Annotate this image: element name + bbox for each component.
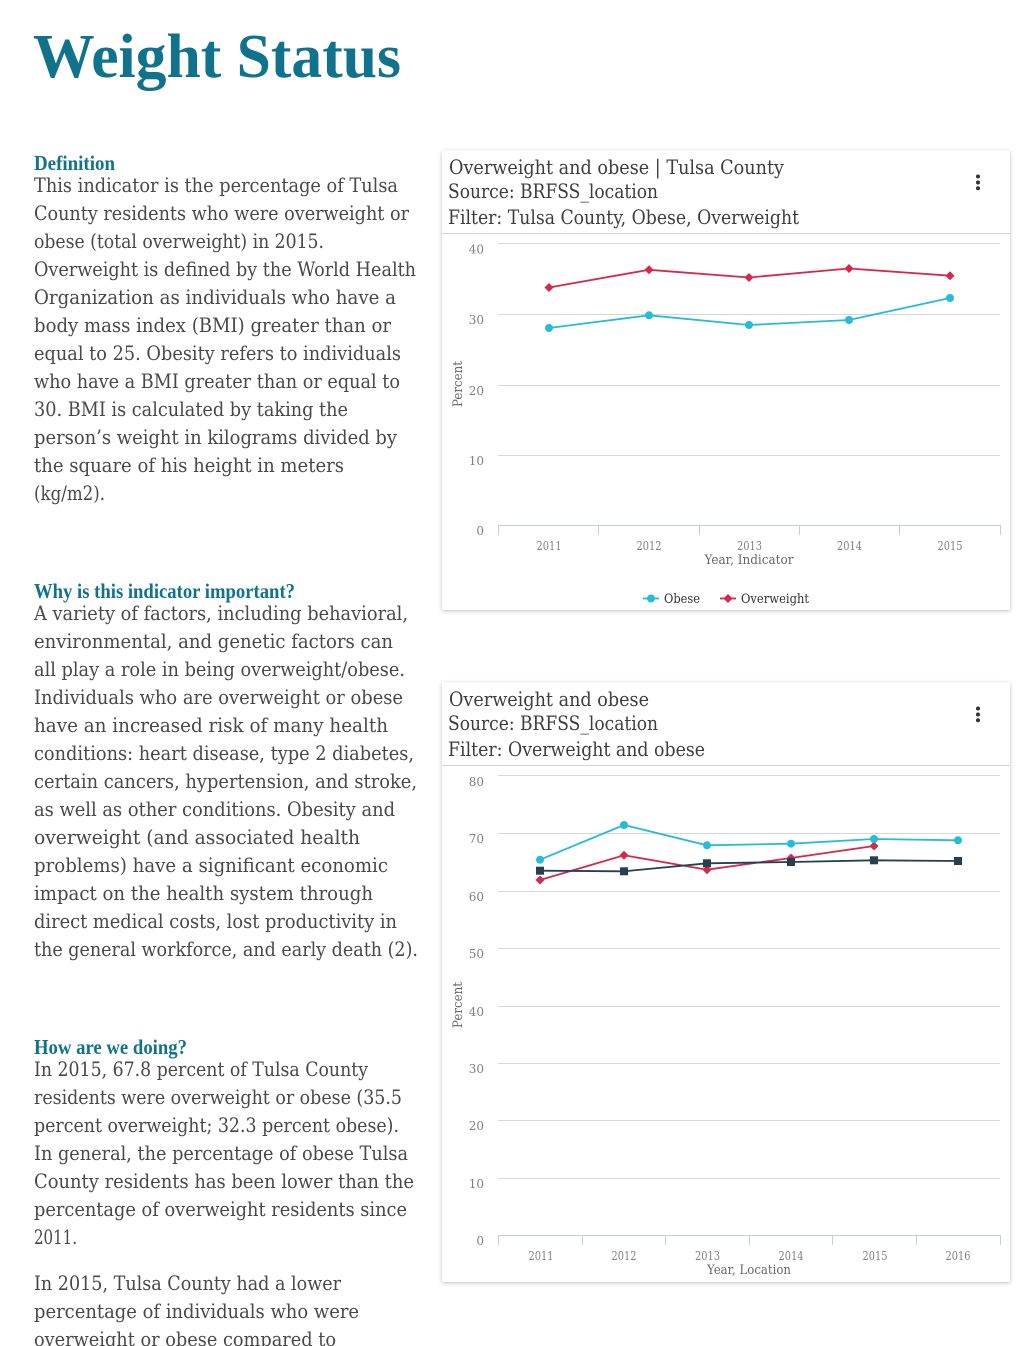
how are we doing body: County residents has been lower than the [34,1169,414,1193]
panel header text [448,687,705,761]
y axis labels: 20 [469,384,484,398]
title: Weight Status [33,23,401,91]
why important body: overweight (and associated health [34,825,360,849]
definition body [34,173,416,505]
series: cyan [536,821,962,864]
icon: menu dots [976,174,980,190]
how are we doing body: residents were overweight or obese (35.5 [34,1085,402,1109]
why important body: all play a role in being overweight/obese. [34,657,405,681]
y axis title: Percent [451,981,466,1028]
y axis labels: 0 [476,524,484,538]
panel: overweight and obese, Tulsa County [442,150,1010,610]
why important body: impact on the health system through [34,881,373,905]
how are we doing body [34,1057,414,1346]
panel header text: Source: BRFSS_location [448,179,658,203]
y axis labels: 50 [469,947,484,961]
panel header text [448,155,799,229]
why important body: conditions: heart disease, type 2 diabetes, [34,741,414,765]
series: navy [536,856,962,875]
panel header text: Overweight and obese | Tulsa County [449,155,785,180]
panel header text: Source: BRFSS_location [448,711,658,735]
definition body: body mass index (BMI) greater than or [34,313,391,337]
y axis labels [469,242,484,538]
legend [643,592,810,607]
series: obese [545,294,954,332]
y axis labels: 60 [469,890,484,904]
heading: why important: Why is this indicator important? [34,579,295,603]
icon: menu dots [976,706,980,722]
text block: why is this indicator important [33,579,418,961]
y axis labels: 0 [476,1234,484,1248]
y axis labels: 40 [469,242,484,256]
definition body: 30. BMI is calculated by taking the [34,397,348,421]
definition body: (kg/m2). [34,481,105,505]
how are we doing body: percent overweight; 32.3 percent obese). [34,1113,399,1137]
how are we doing body: In general, the percentage of obese Tulsa [34,1141,408,1165]
heading: how are we doing: How are we doing? [34,1035,187,1059]
why important body: A variety of factors, including behavioral, [33,601,408,625]
x axis labels: 2011 [536,539,562,553]
panel header text: Filter: Tulsa County, Obese, Overweight [448,205,799,229]
why important body: as well as other conditions. Obesity and [34,797,395,821]
heading: definition: Definition [34,151,115,175]
text block: definition [34,151,416,505]
x axis labels [528,1249,970,1263]
y axis labels: 80 [469,775,484,789]
why important body: direct medical costs, lost productivity in [34,909,397,933]
x axis labels: 2012 [612,1249,636,1263]
line chart: Tulsa County [451,242,1000,607]
why important body: Individuals who are overweight or obese [34,685,403,709]
why important body [33,601,418,961]
text block: how are we doing [34,1035,414,1346]
legend: Obese [664,592,700,607]
x axis labels: 2013 [695,1249,720,1263]
y axis labels: 10 [469,454,484,468]
how are we doing body: percentage of overweight residents since [34,1197,407,1221]
x axis labels: 2014 [837,539,862,553]
definition body: Organization as individuals who have a [34,285,396,309]
x axis labels: 2013 [737,539,762,553]
y axis labels: 40 [469,1005,484,1019]
definition body: This indicator is the percentage of Tulsa [34,173,398,197]
series: red [536,842,878,884]
y axis labels [469,775,484,1248]
how are we doing body: percentage of individuals who were [34,1299,359,1323]
why important body: certain cancers, hypertension, and stroke, [34,769,417,793]
definition body: Overweight is defined by the World Health [34,257,416,281]
definition body: obese (total overweight) in 2015. [34,229,324,253]
panel header text: Overweight and obese [449,687,649,711]
definition body: County residents who were overweight or [34,201,409,225]
x axis title: Year, Location [706,1263,792,1278]
x axis labels: 2012 [636,539,662,553]
line chart: by location [451,775,1000,1278]
x axis labels: 2014 [778,1249,804,1263]
legend: Overweight [741,592,810,607]
how are we doing body: 2011. [34,1225,77,1249]
x axis labels: 2011 [528,1249,554,1263]
x axis title: Year, Indicator [704,553,794,568]
y axis labels: 20 [469,1119,484,1133]
definition body: person’s weight in kilograms divided by [34,425,398,449]
x axis labels: 2016 [946,1249,970,1263]
x axis labels: 2015 [938,539,962,553]
definition body: who have a BMI greater than or equal to [34,369,400,393]
panel: overweight and obese, by location [442,682,1010,1282]
panel header text: Filter: Overweight and obese [448,737,705,761]
y axis title: Percent [451,360,466,407]
definition body: equal to 25. Obesity refers to individuals [34,341,401,365]
why important body: problems) have a significant economic [34,853,388,877]
how are we doing body: In 2015, Tulsa County had a lower [34,1271,341,1295]
x axis labels [536,539,962,553]
y axis labels: 30 [469,313,484,327]
series: overweight [544,264,954,292]
definition body: the square of his height in meters [34,453,344,477]
y axis labels: 10 [469,1177,484,1191]
why important body: have an increased risk of many health [34,713,388,737]
why important body: environmental, and genetic factors can [34,629,393,653]
y axis labels: 70 [469,832,484,846]
y axis labels: 30 [469,1062,484,1076]
why important body: the general workforce, and early death (2). [34,937,418,961]
how are we doing body: In 2015, 67.8 percent of Tulsa County [34,1057,369,1081]
x axis labels: 2015 [862,1249,888,1263]
